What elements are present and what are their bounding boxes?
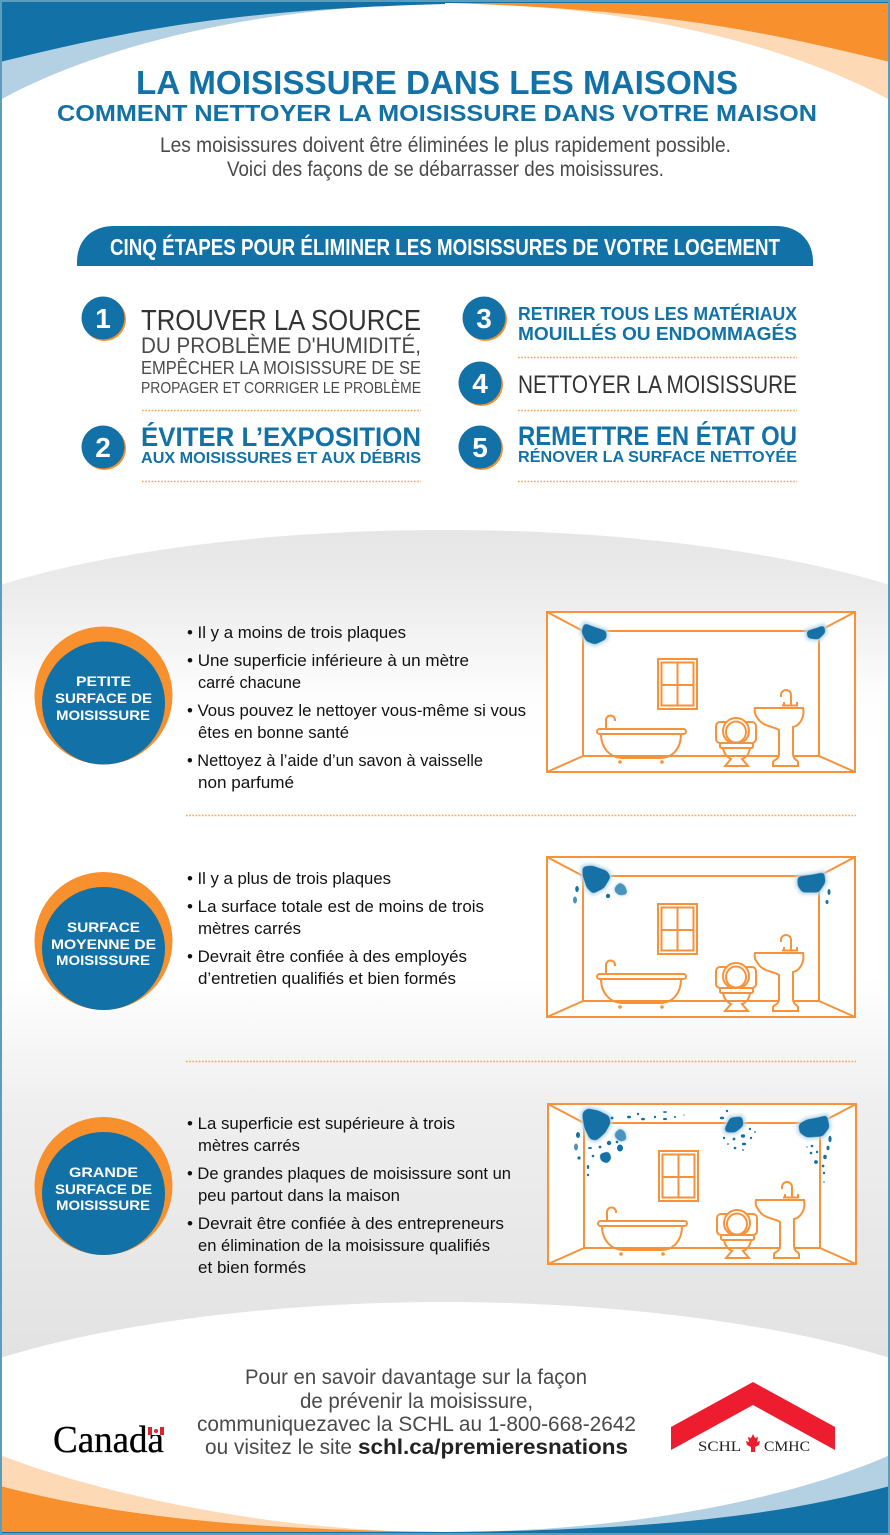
badge: small mould area: SURFACE DE [55,690,152,706]
step 2 badge [82,426,126,470]
step 1 badge [82,296,126,341]
footer contact text: schl.ca/premieresnations [358,1435,628,1459]
list: small mould area: non parfumé [198,774,294,792]
list: large mould area: en élimination de la moisissure qualifiés [198,1237,490,1255]
CMHC house logo: SCHL [698,1439,741,1455]
step 1 text: DU PROBLÈME D'HUMIDITÉ, [141,333,421,358]
badge: small mould area: PETITE [76,673,131,689]
list: small mould area: carré chacune [198,674,301,692]
top swoosh: blue [0,0,445,100]
step 4 badge [458,362,503,406]
list: medium mould area [187,870,484,988]
step 3 text: MOUILLÉS OU ENDOMMAGÉS [518,323,797,344]
list: small mould area: • Il y a moins de trois plaques [187,624,406,642]
list: medium mould area: • Devrait être confiée à des employés [187,948,467,966]
step 5 badge: 5 [472,432,488,463]
footer contact text [197,1366,636,1459]
subtitle: COMMENT NETTOYER LA MOISISSURE DANS VOTRE MAISON [57,100,817,126]
footer contact text: communiquezavec la SCHL au 1-800-668-2642 [197,1413,636,1436]
badge: medium mould area [34,872,172,1010]
bottom swoosh: blue [0,1455,890,1535]
title: LA MOISISSURE DANS LES MAISONS [136,64,738,101]
badge: large mould area [34,1117,172,1255]
badge: large mould area: MOISISSURE [56,1197,150,1213]
top swoosh: orange [0,0,890,100]
list: medium mould area: mètres carrés [198,920,301,938]
step 3 badge: 3 [476,303,492,334]
step 5 text [518,420,797,466]
CMHC house logo [671,1382,835,1455]
step 3 text: RETIRER TOUS LES MATÉRIAUX [518,303,798,324]
step 5 badge [458,426,503,470]
step 5 text: REMETTRE EN ÉTAT OU [518,420,797,451]
step 1 text: TROUVER LA SOURCE [141,305,421,337]
badge: medium mould area: SURFACE [67,919,140,935]
step 4 badge: 4 [472,368,488,399]
badge: small mould area [34,626,172,764]
step 2 badge: 2 [95,432,111,463]
list: medium mould area: • Il y a plus de trois plaques [187,870,391,888]
list: large mould area [187,1115,511,1277]
step 3 text [518,303,798,344]
steps banner [77,226,813,266]
footer contact text: Pour en savoir davantage sur la façon [245,1366,587,1389]
illustration: bathroom with small mould [547,612,855,772]
step 1 text: PROPAGER ET CORRIGER LE PROBLÈME [141,380,421,397]
list: small mould area: • Nettoyez à l’aide d’un savon à vaisselle [187,752,483,770]
badge: large mould area: GRANDE [69,1164,138,1180]
list: large mould area: • Devrait être confiée à des entrepreneurs [187,1215,504,1233]
step 2 text: ÉVITER L’EXPOSITION [141,421,421,452]
list: medium mould area: • La surface totale est de moins de trois [187,898,484,916]
step 4 text: NETTOYER LA MOISISSURE [518,371,797,399]
step 5 text: RÉNOVER LA SURFACE NETTOYÉE [518,449,797,466]
footer contact text: ou visitez le site [205,1436,352,1459]
step 2 text: AUX MOISISSURES ET AUX DÉBRIS [141,450,421,467]
step 1 text: EMPÊCHER LA MOISISSURE DE SE [141,358,421,378]
footer contact text: de prévenir la moisissure, [300,1390,533,1413]
step 2 text [141,421,421,467]
badge: medium mould area: MOYENNE DE [51,936,156,952]
intro text: Les moisissures doivent être éliminées le plus rapidement possible. [160,134,731,157]
list: small mould area [187,624,526,792]
step 1 badge: 1 [95,303,111,334]
badge: small mould area: MOISISSURE [56,707,150,723]
list: large mould area: et bien formés [198,1259,306,1277]
list: small mould area: êtes en bonne santé [198,724,349,742]
list: large mould area: mètres carrés [198,1137,300,1155]
list: medium mould area: d’entretien qualifiés et bien formés [198,970,456,988]
badge: large mould area: SURFACE DE [55,1181,152,1197]
list: large mould area: peu partout dans la maison [198,1187,400,1205]
intro text: Voici des façons de se débarrasser des moisissures. [227,158,664,181]
illustration: bathroom with medium mould [547,857,855,1017]
step 1 text [141,305,421,397]
Canada wordmark: Canada [53,1419,164,1461]
illustration: bathroom with large mould [548,1104,856,1264]
step 3 badge [462,296,507,341]
list: large mould area: • De grandes plaques de moisissure sont un [187,1165,511,1183]
bottom swoosh: orange [0,1455,445,1535]
CMHC house logo: CMHC [764,1439,810,1455]
grey band [0,530,890,1358]
badge: medium mould area: MOISISSURE [56,952,150,968]
list: large mould area: • La superficie est supérieure à trois [187,1115,455,1133]
intro text [160,134,731,181]
list: small mould area: • Une superficie inférieure à un mètre [187,652,469,670]
list: small mould area: • Vous pouvez le nettoyer vous-même si vous [187,702,526,720]
